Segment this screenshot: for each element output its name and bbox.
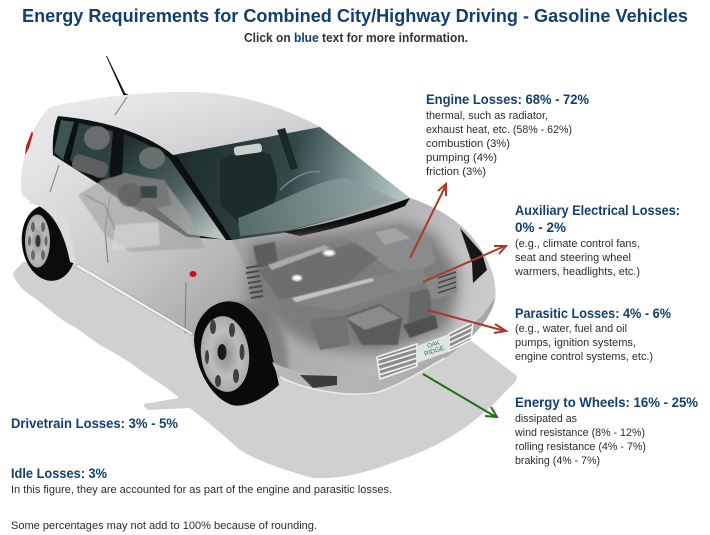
text: parasitic losses: (e.g., water, fuel and oil [515,323,627,335]
car body [21,92,495,395]
title: Energy Requirements for Combined City/Highway Driving - Gasoline Vehicles [22,5,688,26]
arrow: energy to wheels [423,374,497,417]
text: auxiliary electrical losses: Auxiliary Electrical Losses: [515,202,680,218]
front wheel [194,301,279,406]
text: auxiliary electrical losses: seat and steering wheel [515,252,631,264]
arrow: parasitic losses [427,310,506,333]
text: energy to wheels: wind resistance (8% - 12%) [514,427,645,439]
text: parasitic losses [515,305,671,363]
footnote: Some percentages may not add to 100% because of rounding. [11,520,317,532]
subtitle: Click on blue text for more information. [244,30,468,45]
text: engine losses [426,91,590,178]
side windows [53,116,232,240]
text: engine losses: thermal, such as radiator, [426,110,548,122]
arrow: auxiliary electrical losses [423,246,506,282]
text: drivetrain losses: Drivetrain Losses: 3% - 5% [11,415,179,431]
text: parasitic losses: engine control systems, etc.) [515,351,653,363]
Oak Ridge plate [417,334,449,363]
side sill [76,264,193,336]
text: engine losses: friction (3%) [426,166,486,178]
text: energy to wheels: rolling resistance (4% - 7%) [515,441,646,453]
text: energy to wheels: Energy to Wheels: 16% - 25% [515,394,699,410]
rear wheel [17,202,81,284]
bumper lower rim [280,358,445,394]
rear light [25,131,33,155]
text: parasitic losses: Parasitic Losses: 4% - 6% [515,305,671,321]
side marker [190,271,196,277]
Oak Ridge plate: OAK [427,340,441,350]
text: energy to wheels: dissipated as [515,413,577,425]
fog lamp [300,375,337,388]
text: idle losses: Idle Losses: 3% [11,465,107,481]
rear wheel arch [28,198,76,264]
door panel lines [50,97,186,333]
spring [246,266,263,298]
text: idle losses: In this figure, they are accounted for as part of the engine and parasitic losses. [11,484,392,496]
antenna [106,56,131,98]
hood [232,198,495,395]
ground shadow [13,250,517,478]
text: engine losses: pumping (4%) [426,152,497,164]
grille [377,322,473,379]
roof [50,92,320,155]
text: energy to wheels: braking (4% - 7%) [515,455,600,467]
engine blocks [345,224,436,278]
text: engine losses: combustion (3%) [426,138,510,150]
text: auxiliary electrical losses: warmers, headlights, etc.) [514,266,640,278]
text: auxiliary electrical losses [514,202,680,278]
car illustration [13,56,517,478]
text: energy to wheels [514,394,699,467]
windshield [173,127,410,240]
text: engine losses: Engine Losses: 68% - 72% [426,91,590,107]
ghosted engine seen through side [78,173,205,252]
text: engine losses: exhaust heat, etc. (58% - 62%) [426,124,572,136]
text: parasitic losses: pumps, ignition systems, [515,337,636,349]
front bumper [272,298,495,395]
Oak Ridge plate: RIDGE [423,345,446,358]
text: idle losses [11,465,392,496]
text: auxiliary electrical losses: 0% - 2% [515,219,567,235]
front wheel arch shading [195,302,288,390]
headlamp [460,228,487,283]
hood translucent engine bay [246,223,458,353]
text: auxiliary electrical losses: (e.g., climate control fans, [515,238,640,250]
arrow: engine losses [410,184,446,258]
highlights [323,250,335,256]
